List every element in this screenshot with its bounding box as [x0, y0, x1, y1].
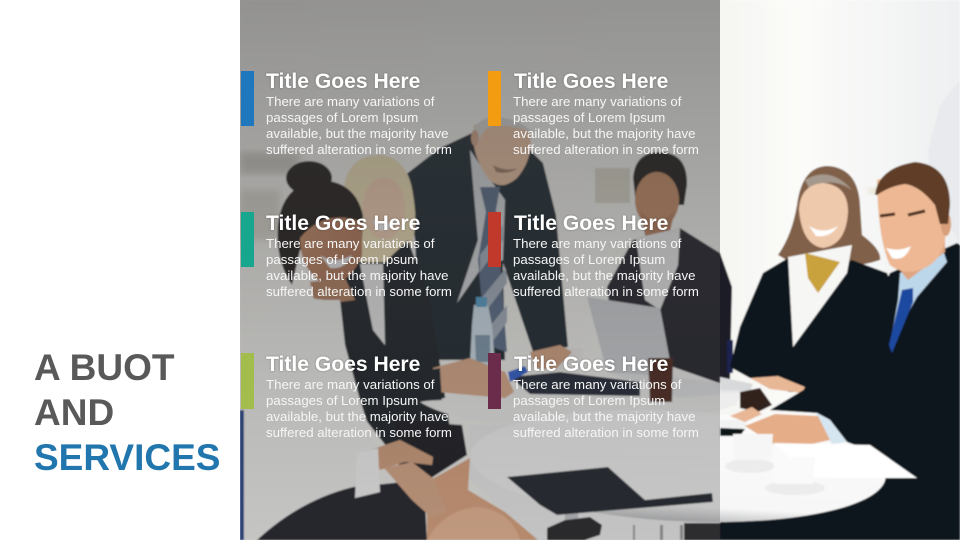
text block: item 4: Title Goes Here	[514, 212, 668, 234]
heading: A Buot and Services: A BUOT	[34, 347, 174, 388]
man hand and cuff	[815, 413, 847, 444]
text block: item 2: Title Goes Here	[514, 70, 668, 92]
text block: item 1: available, but the majority have	[266, 126, 448, 141]
accent bar: teal	[241, 212, 254, 267]
blue chair	[240, 410, 244, 540]
text block: item 1: suffered alteration in some form	[266, 142, 452, 157]
text block: item 1	[266, 70, 452, 157]
text block: item 1: Title Goes Here	[266, 70, 420, 92]
text block: item 4	[513, 212, 699, 299]
text block: item 2	[513, 70, 699, 157]
photo: business team meeting at a table	[240, 0, 960, 540]
text block: item 5: suffered alteration in some form	[266, 425, 452, 440]
translucent grey overlay panel	[240, 0, 720, 540]
folder	[507, 467, 713, 515]
folder and cup on back table	[510, 372, 640, 396]
water bottle	[470, 305, 495, 365]
text block: item 6: suffered alteration in some form	[513, 425, 699, 440]
text block: item 5: Title Goes Here	[266, 352, 420, 376]
text block: item 5: There are many variations of	[266, 377, 434, 392]
woman right	[730, 166, 892, 393]
text block: item 6: passages of Lorem Ipsum	[513, 393, 665, 408]
text block: item 2: There are many variations of	[513, 94, 681, 109]
front woman shirt	[244, 297, 380, 540]
wall	[240, 0, 960, 540]
hands on back table	[433, 358, 514, 398]
accent bar: red	[488, 212, 501, 267]
heading: A Buot and Services: SERVICES	[34, 437, 220, 478]
accent bar: green	[241, 353, 254, 409]
text block: item 4: available, but the majority have	[513, 268, 695, 283]
foreground table	[467, 400, 889, 532]
text block: item 4: suffered alteration in some form	[513, 284, 699, 299]
accent bar: plum	[488, 353, 501, 409]
accent bar: blue	[241, 71, 254, 126]
text block: item 2: suffered alteration in some form	[513, 142, 699, 157]
dark object and papers	[720, 377, 753, 391]
text block: item 5: passages of Lorem Ipsum	[266, 393, 418, 408]
floor items	[565, 510, 578, 540]
paper and cups	[773, 443, 917, 478]
back right woman	[607, 152, 733, 395]
back table surface	[420, 367, 745, 426]
coffee glass	[648, 358, 673, 402]
text block: item 4: There are many variations of	[513, 236, 681, 251]
text block: item 3: available, but the majority have	[266, 268, 448, 283]
text block: item 5: available, but the majority have	[266, 409, 448, 424]
skirt	[257, 482, 427, 540]
text block: item 1: passages of Lorem Ipsum	[266, 110, 418, 125]
text block: item 6	[513, 352, 699, 440]
text block: item 2: available, but the majority have	[513, 126, 695, 141]
text block: item 5	[266, 352, 452, 440]
laptop	[587, 297, 673, 377]
text block: item 3: passages of Lorem Ipsum	[266, 252, 418, 267]
heading: A Buot and Services: AND	[34, 392, 114, 433]
front woman head	[278, 161, 363, 305]
text block: item 3	[266, 212, 452, 299]
text block: item 2: passages of Lorem Ipsum	[513, 110, 665, 125]
text block: item 6: There are many variations of	[513, 377, 681, 392]
text block: item 3: There are many variations of	[266, 236, 434, 251]
blonde woman	[335, 155, 455, 470]
accent bar: orange	[488, 71, 501, 126]
white floor area	[470, 425, 720, 540]
legs	[427, 458, 538, 540]
text block: item 1: There are many variations of	[266, 94, 434, 109]
text block: item 3: Title Goes Here	[266, 212, 420, 234]
text block: item 3: suffered alteration in some form	[266, 284, 452, 299]
text block: item 6: available, but the majority have	[513, 409, 695, 424]
man right	[770, 162, 960, 540]
text block: item 6: Title Goes Here	[514, 352, 668, 376]
text block: item 4: passages of Lorem Ipsum	[513, 252, 665, 267]
standing man	[405, 118, 568, 360]
arms	[370, 440, 433, 470]
heading: A Buot and Services	[34, 347, 220, 478]
